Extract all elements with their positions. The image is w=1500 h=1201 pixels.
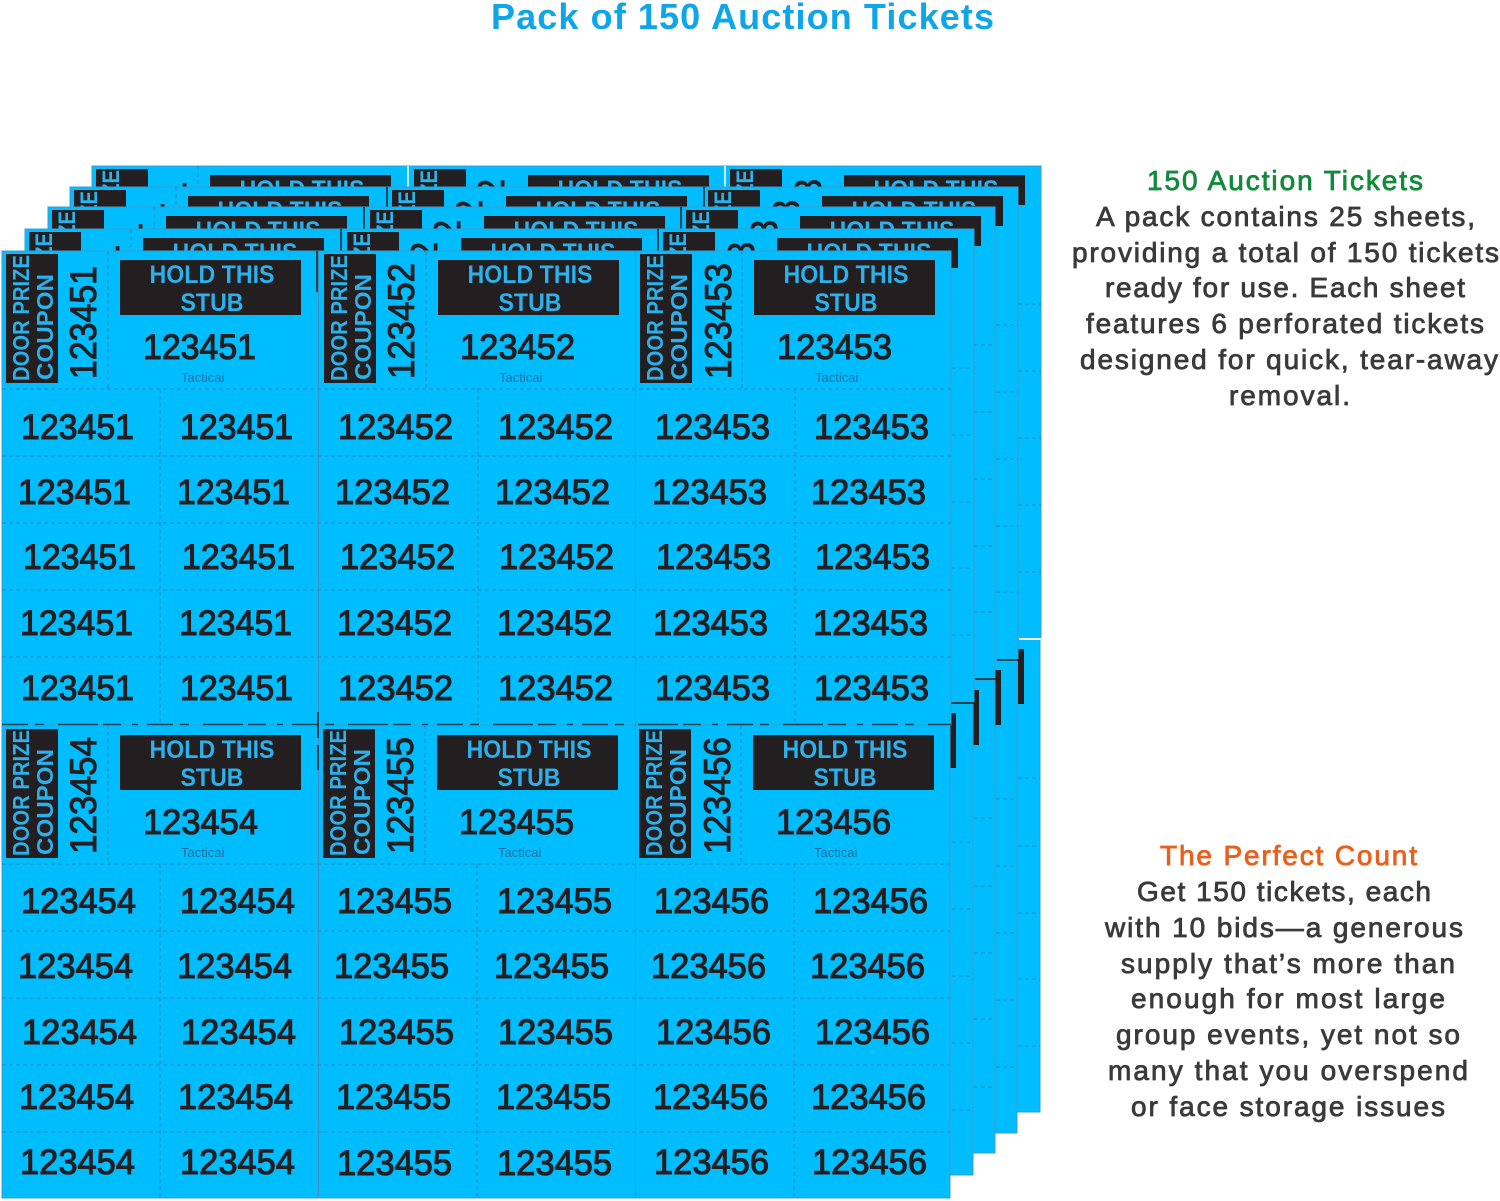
ticket 123453 xyxy=(640,254,935,708)
ticket 123453: 123453 xyxy=(652,473,767,512)
back sheet layer 1: HOLD THIS xyxy=(172,239,298,267)
back sheet layer 3: ZE xyxy=(709,191,736,217)
back sheet layer 4: ZE xyxy=(415,170,442,196)
ticket 123454: STUB xyxy=(180,764,244,792)
description: providing a total of 150 tickets xyxy=(1072,237,1499,268)
ticket 123453: STUB xyxy=(814,289,878,317)
back sheet layer 3: 3 xyxy=(766,200,807,218)
stacked sheets of tickets xyxy=(2,166,1043,1198)
ticket 123456: COUPON xyxy=(665,749,691,855)
ticket 123456: 123456 xyxy=(651,947,766,986)
back sheet layer 3: ZE xyxy=(75,191,102,217)
back sheet layer 3: HOLD THIS xyxy=(218,197,342,225)
ticket 123452: HOLD THIS xyxy=(468,261,592,289)
back sheet layer 4: 2 xyxy=(471,179,512,197)
ticket 123454: 123454 xyxy=(20,1143,135,1182)
description: enough for most large xyxy=(1131,983,1445,1014)
ticket 123452: 123452 xyxy=(338,669,453,708)
ticket 123456: DOOR PRIZE xyxy=(641,730,667,856)
back sheet layer 1: ZE xyxy=(664,233,691,259)
back sheet layer 3: 1 xyxy=(131,203,172,221)
ticket 123451: 123451 xyxy=(143,328,256,367)
back sheet layer 4: HOLD THIS xyxy=(558,176,682,204)
ticket 123454: 123454 xyxy=(63,737,104,854)
ticket 123454: HOLD THIS xyxy=(150,736,274,764)
ticket 123452: 123452 xyxy=(495,473,610,512)
ticket 123453: 123453 xyxy=(813,604,928,643)
back sheet layer 4: ZE xyxy=(97,170,124,196)
ticket 123452: DOOR PRIZE xyxy=(326,255,352,381)
ticket 123453: Tacticai xyxy=(815,370,858,385)
ticket 123453: 123453 xyxy=(814,408,929,447)
ticket 123454: 123454 xyxy=(178,1078,293,1117)
back sheet layer 2 xyxy=(48,207,996,1153)
ticket 123456: 123456 xyxy=(653,1078,768,1117)
back sheet layer 3: ZE xyxy=(393,191,420,217)
ticket 123451: 123451 xyxy=(63,266,104,379)
back sheet layer 4: 3 xyxy=(788,179,829,197)
ticket 123456: 123456 xyxy=(811,1078,926,1117)
back sheet layer 3: HOLD THIS xyxy=(852,197,976,225)
ticket 123455: Tacticai xyxy=(498,845,541,860)
ticket 123455: 123455 xyxy=(498,1013,613,1052)
description: features 6 perforated tickets xyxy=(1086,308,1484,339)
ticket 123453: 123453 xyxy=(656,538,771,577)
back sheet layer 4: HOLD THIS xyxy=(874,176,998,204)
ticket 123453: 123453 xyxy=(655,408,770,447)
ticket 123456: 123456 xyxy=(812,1143,927,1182)
ticket 123456: HOLD THIS xyxy=(782,736,908,764)
ticket 123455: 123455 xyxy=(497,1144,612,1183)
ticket 123455: DOOR PRIZE xyxy=(325,730,351,856)
ticket 123451: 123451 xyxy=(180,669,293,708)
ticket 123455: 123455 xyxy=(494,947,609,986)
ticket 123452: 123452 xyxy=(337,604,452,643)
description xyxy=(1072,201,1499,411)
ticket 123456: 123456 xyxy=(654,882,769,921)
ticket 123452: 123452 xyxy=(498,669,613,708)
back sheet layer 2: 1 xyxy=(109,223,150,241)
ticket 123454: 123454 xyxy=(177,947,292,986)
ticket 123451: 123451 xyxy=(179,604,292,643)
description: ready for use. Each sheet xyxy=(1105,272,1465,303)
back sheet layer 1: HOLD THIS xyxy=(806,239,932,267)
back sheet layer 4: HOLD THIS xyxy=(240,176,364,204)
ticket 123456: 123456 xyxy=(697,737,738,854)
description: removal. xyxy=(1229,380,1350,411)
back sheet layer 1 xyxy=(25,229,975,1175)
text block: 150 Auction Tickets xyxy=(1072,165,1499,411)
back sheet layer 4: ZE xyxy=(731,170,758,196)
ticket 123454: 123454 xyxy=(181,1013,296,1052)
heading: The Perfect Count: The Perfect Count xyxy=(1160,840,1417,871)
ticket 123454: COUPON xyxy=(32,749,58,855)
description: or face storage issues xyxy=(1131,1091,1445,1122)
back sheet layer 1: ZE xyxy=(30,233,57,259)
ticket 123451: 123451 xyxy=(20,604,133,643)
text block: The Perfect Count xyxy=(1104,840,1468,1122)
ticket 123451: HOLD THIS xyxy=(150,261,274,289)
ticket 123454: 123454 xyxy=(22,1013,137,1052)
ticket 123454 xyxy=(6,729,301,1182)
description: Get 150 tickets, each xyxy=(1137,876,1431,907)
ticket 123452: COUPON xyxy=(350,274,376,380)
front sheet background xyxy=(2,251,951,1198)
back sheet layer 4 xyxy=(92,166,1043,1112)
ticket 123455: STUB xyxy=(498,764,560,792)
back sheet layer 2: 3 xyxy=(744,220,785,238)
ticket 123456: 123456 xyxy=(810,947,925,986)
description: A pack contains 25 sheets, xyxy=(1096,201,1475,232)
ticket 123451: COUPON xyxy=(32,274,58,380)
back sheet layer 3 xyxy=(70,187,1019,1133)
ticket 123455: 123455 xyxy=(337,882,452,921)
description xyxy=(1104,876,1468,1122)
ticket 123451: STUB xyxy=(180,289,244,317)
ticket 123453: 123453 xyxy=(814,669,929,708)
ticket 123452: 123452 xyxy=(499,538,614,577)
back sheet layer 1: ZE xyxy=(348,233,375,259)
ticket 123456: 123456 xyxy=(815,1013,930,1052)
ticket 123454: 123454 xyxy=(21,882,136,921)
ticket 123456: 123456 xyxy=(813,882,928,921)
ticket 123452: Tacticai xyxy=(499,370,542,385)
back sheet layer 2: HOLD THIS xyxy=(830,217,954,245)
description: many that you overspend xyxy=(1108,1055,1468,1086)
ticket 123455: 123455 xyxy=(337,1144,452,1183)
ticket 123452: 123452 xyxy=(335,473,450,512)
ticket 123454: 123454 xyxy=(180,882,295,921)
ticket 123456: 123456 xyxy=(776,803,891,842)
description: group events, yet not so xyxy=(1116,1019,1460,1050)
ticket 123455 xyxy=(323,729,618,1183)
ticket 123451: 123451 xyxy=(182,538,295,577)
ticket 123455: 123455 xyxy=(334,947,449,986)
ticket 123452 xyxy=(324,254,619,708)
ticket 123453: 123453 xyxy=(777,328,892,367)
ticket 123453: 123453 xyxy=(811,473,926,512)
ticket 123452: 123452 xyxy=(340,538,455,577)
ticket 123453: 123453 xyxy=(815,538,930,577)
back sheet layer 2: HOLD THIS xyxy=(196,217,320,245)
ticket 123451 xyxy=(6,254,301,708)
ticket 123454: 123454 xyxy=(18,947,133,986)
ticket 123456: STUB xyxy=(814,764,876,792)
ticket 123454: DOOR PRIZE xyxy=(8,730,34,856)
ticket 123451: 123451 xyxy=(21,408,134,447)
back sheet layer 3: HOLD THIS xyxy=(536,197,660,225)
ticket 123452: 123452 xyxy=(498,408,613,447)
ticket 123454: 123454 xyxy=(19,1078,134,1117)
ticket 123451: Tacticai xyxy=(181,370,224,385)
ticket 123452: STUB xyxy=(498,289,562,317)
back sheet layer 1: HOLD THIS xyxy=(490,239,616,267)
ticket 123453: HOLD THIS xyxy=(784,261,908,289)
ticket 123451: 123451 xyxy=(180,408,293,447)
ticket 123453: 123453 xyxy=(653,604,768,643)
back sheet layer 1: 3 xyxy=(721,242,762,260)
ticket 123455: 123455 xyxy=(497,882,612,921)
description: with 10 bids—a generous xyxy=(1104,912,1463,943)
back sheet layer 2: 2 xyxy=(427,220,468,238)
ticket 123455: HOLD THIS xyxy=(466,736,592,764)
ticket 123454: 123454 xyxy=(180,1143,295,1182)
ticket 123451: 123451 xyxy=(18,473,131,512)
ticket 123453: 123453 xyxy=(698,263,739,379)
ticket 123452: 123452 xyxy=(460,328,575,367)
back sheet layer 3: 2 xyxy=(449,200,490,218)
ticket 123455: 123455 xyxy=(496,1078,611,1117)
description: supply that’s more than xyxy=(1121,948,1455,979)
back sheet layer 2: ZE xyxy=(371,211,398,237)
back sheet layer 2: ZE xyxy=(53,211,80,237)
ticket 123456: 123456 xyxy=(654,1143,769,1182)
ticket 123454: 123454 xyxy=(143,803,258,842)
back sheet layer 4: 1 xyxy=(153,182,194,200)
back sheet layer 2: ZE xyxy=(687,211,714,237)
ticket 123452: 123452 xyxy=(381,263,422,379)
ticket 123453: COUPON xyxy=(666,274,692,380)
ticket 123456: 123456 xyxy=(656,1013,771,1052)
ticket 123455: 123455 xyxy=(339,1013,454,1052)
ticket 123455: 123455 xyxy=(336,1078,451,1117)
back sheet layer 2: HOLD THIS xyxy=(514,217,638,245)
back sheet layer 1: 1 xyxy=(86,245,127,263)
ticket 123451: 123451 xyxy=(23,538,136,577)
ticket 123455: COUPON xyxy=(349,749,375,855)
heading: 150 Auction Tickets: 150 Auction Tickets xyxy=(1147,165,1423,196)
ticket 123456: Tacticai xyxy=(814,845,857,860)
ticket 123451: DOOR PRIZE xyxy=(8,255,34,381)
ticket 123451: 123451 xyxy=(21,669,134,708)
ticket 123453: 123453 xyxy=(655,669,770,708)
ticket 123452: 123452 xyxy=(338,408,453,447)
ticket 123456 xyxy=(639,729,934,1182)
back sheet layer 1: 2 xyxy=(404,242,445,260)
ticket 123452: 123452 xyxy=(497,604,612,643)
ticket 123453: DOOR PRIZE xyxy=(642,255,668,381)
description: designed for quick, tear-away xyxy=(1080,344,1498,375)
ticket 123455: 123455 xyxy=(459,803,574,842)
ticket 123451: 123451 xyxy=(177,473,290,512)
ticket 123454: Tacticai xyxy=(181,845,224,860)
ticket 123455: 123455 xyxy=(380,737,421,854)
